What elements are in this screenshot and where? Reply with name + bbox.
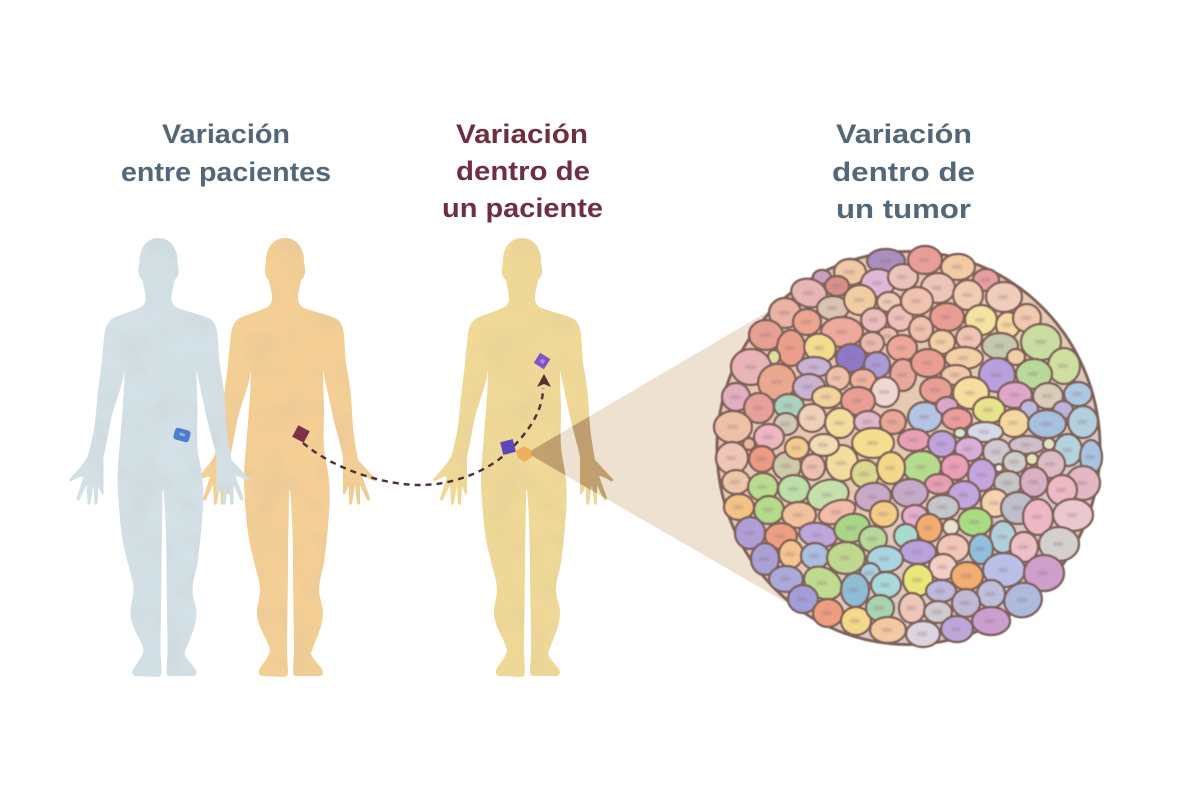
cell nuclei [728, 260, 1093, 634]
figure: yellow patient body [433, 238, 613, 677]
icon: blue tumor on blue patient [173, 427, 191, 443]
heading: variación dentro de un tumor: un tumor [836, 194, 972, 224]
heading: variación dentro de un tumor: dentro de [832, 157, 975, 187]
icon: indigo tumor on yellow patient [500, 439, 516, 455]
icon: purple tumor on yellow patient [534, 353, 550, 369]
heading: variación dentro de un tumor: Variación [836, 119, 972, 149]
zoom cone from tumor to enlarged view [527, 309, 792, 606]
figure: orange patient body [196, 238, 376, 677]
heading: variación entre pacientes [121, 119, 331, 187]
heading: variación dentro de un paciente: un paciente [442, 193, 603, 223]
icon: orange tumor on yellow patient [516, 446, 532, 462]
heading: variación dentro de un paciente [442, 119, 603, 223]
heading: variación dentro de un paciente: Variación [456, 119, 588, 149]
heading: variación dentro de un tumor [832, 119, 975, 224]
heading: variación dentro de un paciente: dentro de [456, 156, 590, 186]
figure: blue patient body [69, 238, 250, 677]
heading: variación entre pacientes: Variación [162, 119, 290, 149]
heading: variación entre pacientes: entre pacientes [121, 157, 331, 187]
enlarged tumor cell cluster [714, 246, 1102, 647]
arrow: dashed metastasis path [303, 374, 551, 485]
icon: maroon tumor on orange patient [292, 425, 310, 443]
